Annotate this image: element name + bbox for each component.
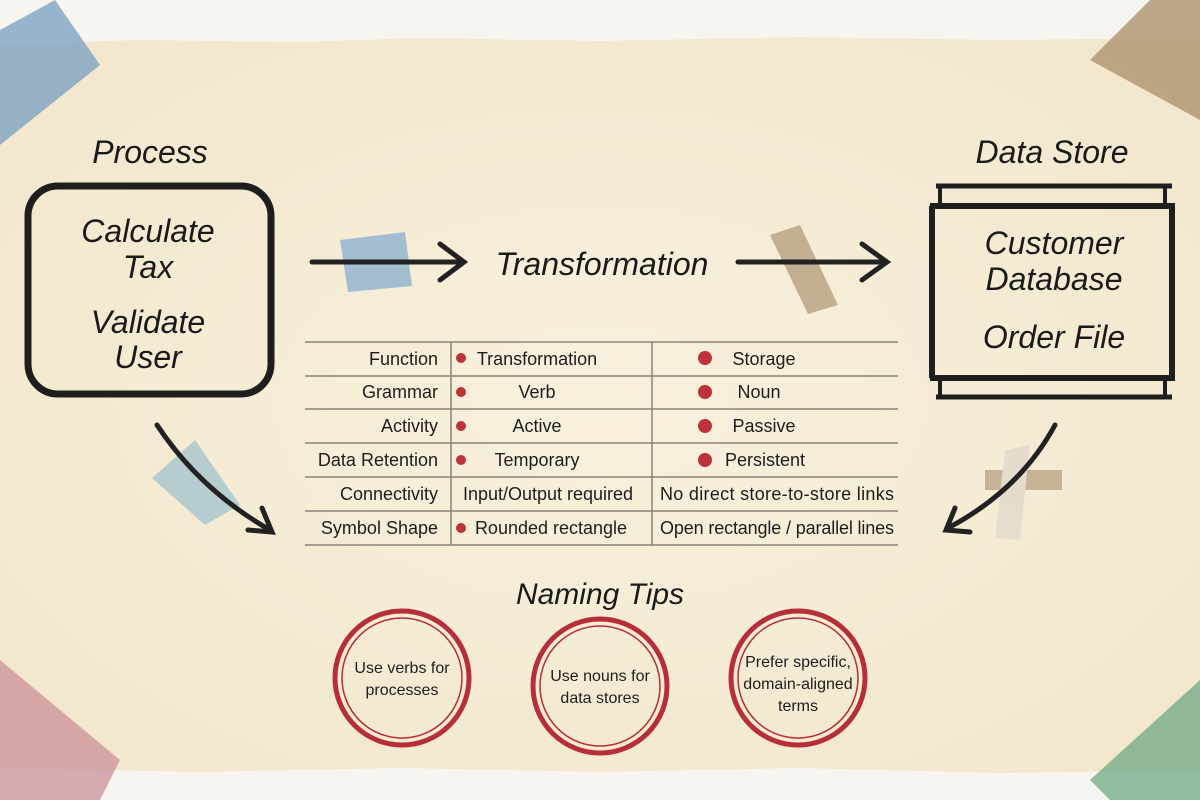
tip circle 2 [533, 619, 667, 753]
process box: Calculate [81, 213, 215, 249]
process heading: Process [92, 134, 208, 170]
comparison table: Passive [732, 416, 796, 436]
comparison table: Transformation [477, 349, 597, 369]
process box: Validate [91, 304, 205, 340]
tip circle 2: Use nouns for [550, 668, 650, 685]
comparison table: Symbol Shape [321, 518, 438, 538]
naming tips heading: Naming Tips [516, 578, 684, 611]
tip circle 1: processes [366, 682, 438, 699]
tape: bottom right [1090, 680, 1200, 800]
tape on left arrow [340, 232, 412, 292]
comparison table: Open rectangle / parallel lines [660, 518, 894, 538]
process box: Tax [123, 249, 174, 285]
arrow: process down to table [157, 425, 272, 532]
process box [28, 186, 271, 394]
data store heading: Data Store [976, 134, 1128, 170]
comparison table [305, 342, 898, 545]
comparison table: No direct store-to-store links [660, 484, 894, 504]
arrow: data store down to table [946, 425, 1055, 532]
tape on right arrow [770, 225, 838, 314]
process box: User [114, 339, 183, 375]
comparison table: Verb [518, 382, 556, 402]
comparison table: Noun [737, 382, 781, 402]
comparison table: Temporary [494, 450, 580, 470]
transformation label: Transformation [496, 246, 708, 282]
tip circle 3: domain-aligned [743, 676, 853, 693]
tip circle 3: terms [778, 698, 818, 715]
comparison table: Storage [732, 349, 796, 369]
tip circle 3 [731, 611, 865, 745]
tape: top left [0, 0, 100, 145]
comparison table: Activity [381, 416, 438, 436]
tip circle 1: Use verbs for [354, 660, 450, 677]
tip circle 1 [335, 611, 469, 745]
tape: bottom left [0, 660, 120, 800]
tape lower right [985, 445, 1062, 540]
data store symbol: Order File [983, 319, 1125, 355]
arrow: transformation to data store [738, 244, 887, 280]
arrow: process to transformation [312, 244, 464, 280]
data store symbol: Customer [985, 225, 1125, 261]
comparison table: Function [369, 349, 438, 369]
tip circle 2: data stores [560, 690, 640, 707]
comparison table: Data Retention [318, 450, 438, 470]
comparison table: Active [512, 416, 562, 436]
tape lower left [152, 440, 240, 525]
comparison table: Persistent [725, 450, 805, 470]
comparison table: Grammar [362, 382, 438, 402]
data store symbol [930, 186, 1175, 397]
tip circle 3: Prefer specific, [745, 654, 851, 671]
comparison table: Rounded rectangle [475, 518, 627, 538]
comparison table: Connectivity [340, 484, 438, 504]
comparison table: Input/Output required [463, 484, 633, 504]
tape: top right [1090, 0, 1200, 120]
data store symbol: Database [986, 261, 1122, 297]
